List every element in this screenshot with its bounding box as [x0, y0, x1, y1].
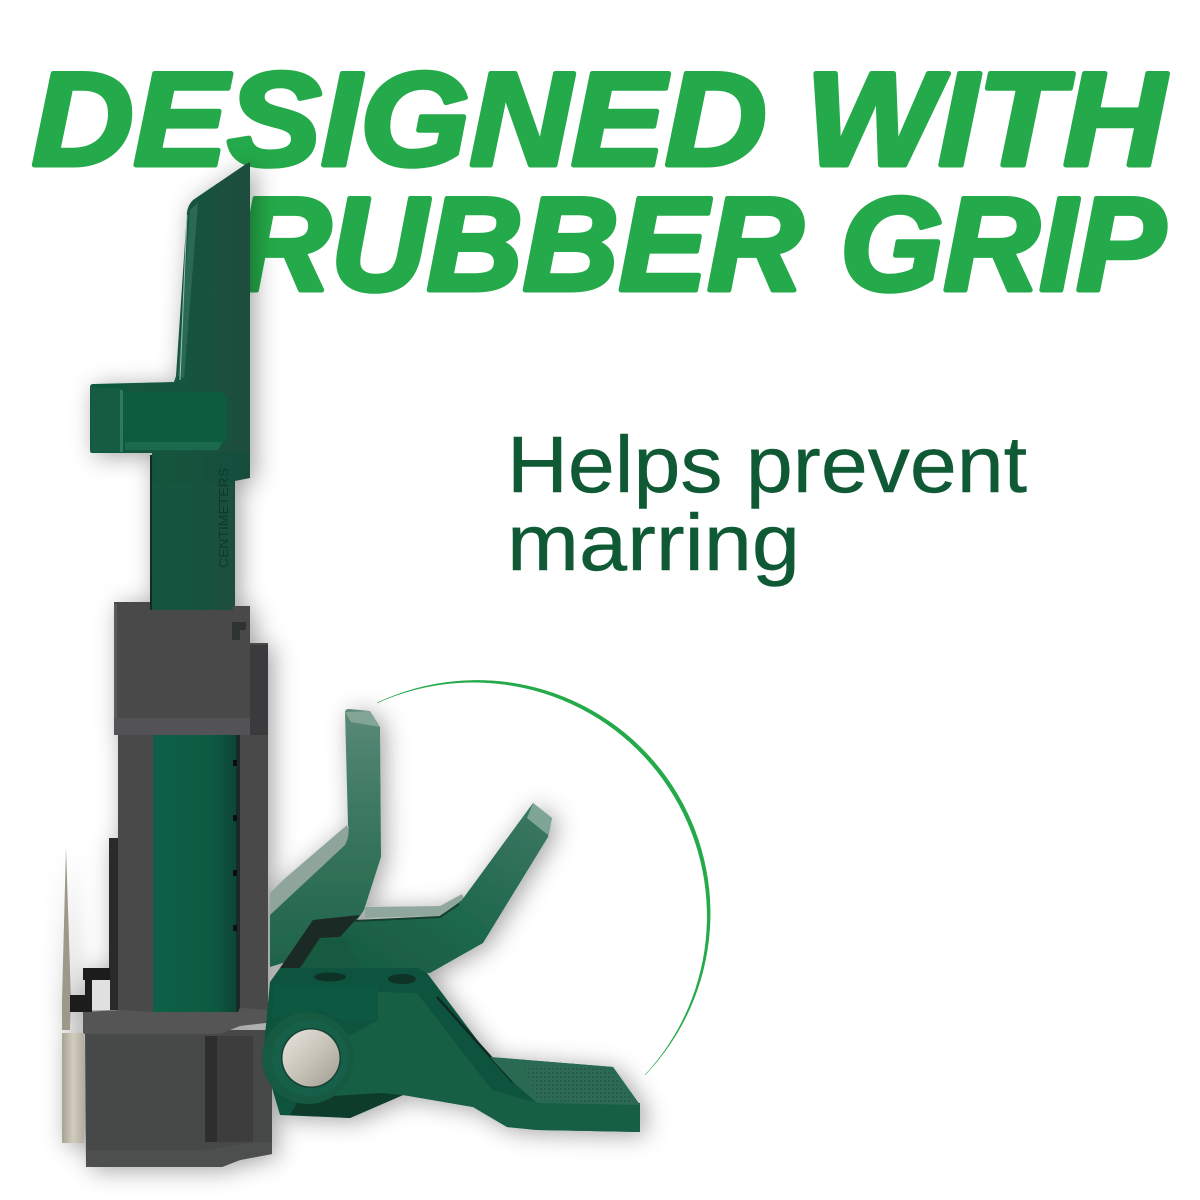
text block: helps prevent marring: Helps prevent [507, 420, 1027, 509]
rear rubber-tipped arm [270, 709, 381, 967]
title: designed with rubber grip: DESIGNED WITH [32, 46, 1168, 194]
gray housing [83, 602, 274, 1167]
ruler label: CENTIMETERS [216, 468, 231, 568]
callout arc around the grip [377, 680, 710, 1075]
title: designed with rubber grip [32, 46, 1168, 319]
title: designed with rubber grip: RUBBER GRIP [235, 171, 1165, 319]
text block: helps prevent marring: marring [507, 498, 800, 587]
product: clamp tool [62, 162, 640, 1167]
metal blade and mount [62, 847, 110, 1143]
lower lever with foot pad [262, 968, 640, 1132]
front rubber-tipped arm [280, 803, 552, 973]
pivot boss and metal pin [262, 1012, 354, 1104]
upper jaw and ruler bar [90, 162, 250, 613]
text block: helps prevent marring [507, 420, 1027, 587]
pivot holes [314, 972, 346, 982]
